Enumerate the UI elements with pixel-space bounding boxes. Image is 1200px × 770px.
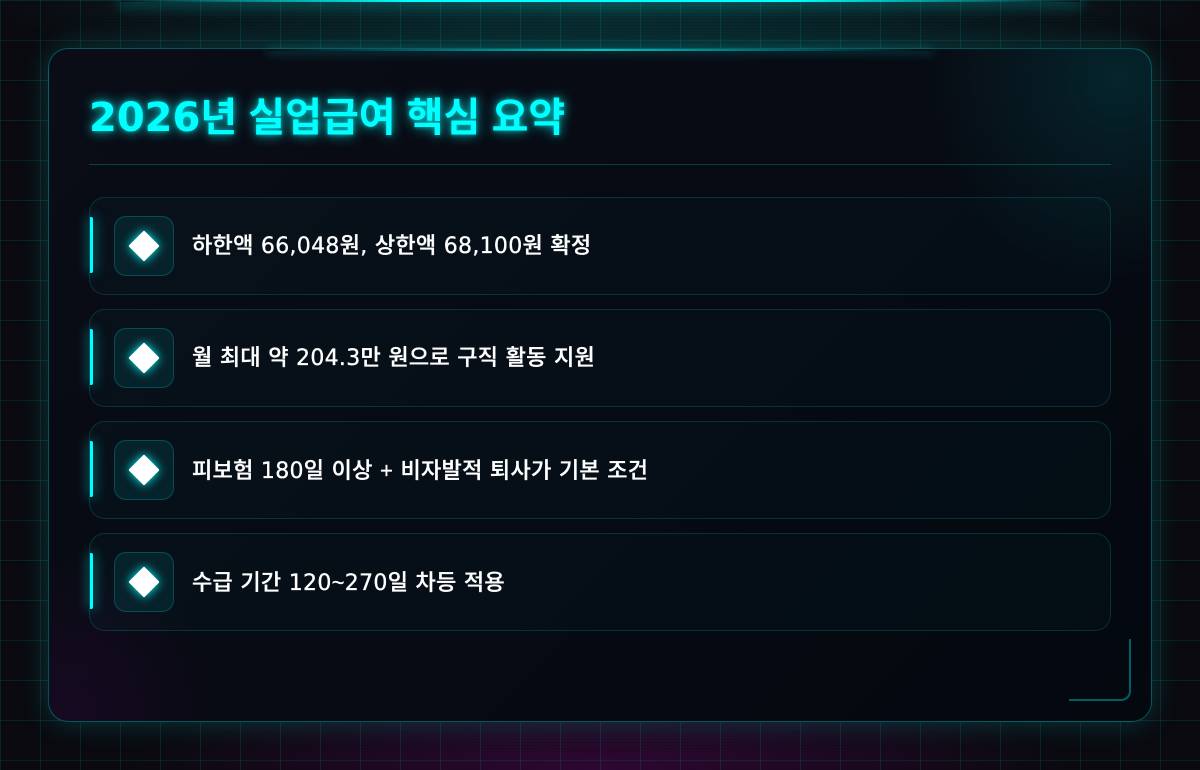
item text 3: 피보험 180일 이상 + 비자발적 퇴사가 기본 조건 <box>192 458 648 484</box>
item text 4: 수급 기간 120~270일 차등 적용 <box>192 570 505 596</box>
accent bar 1 <box>90 217 93 273</box>
item text 2: 월 최대 약 204.3만 원으로 구직 활동 지원 <box>192 346 595 371</box>
item 4: benefit period <box>89 533 1111 631</box>
item 1: benefit limits <box>89 197 1111 295</box>
item 2: monthly maximum <box>89 309 1111 407</box>
icon: diamond 1 <box>114 216 174 276</box>
icon: diamond 3 <box>114 440 174 500</box>
title: 2026년 실업급여 핵심 요약 <box>89 95 565 141</box>
top glow bar <box>120 0 1080 2</box>
corner bracket <box>1069 639 1131 701</box>
card top glow bar <box>268 49 932 51</box>
accent bar 4 <box>90 553 93 609</box>
item 3: eligibility <box>89 421 1111 519</box>
accent bar 3 <box>90 441 93 497</box>
icon: diamond 2 <box>114 328 174 388</box>
item text 1: 하한액 66,048원, 상한액 68,100원 확정 <box>192 234 591 259</box>
accent bar 2 <box>90 329 93 385</box>
icon: diamond 4 <box>114 552 174 612</box>
